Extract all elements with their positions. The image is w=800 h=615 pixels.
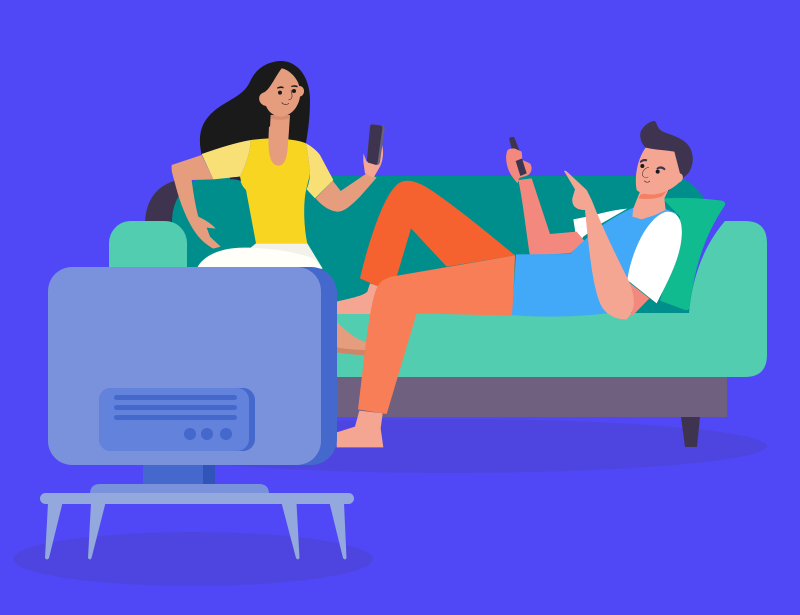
sofa seat and right arm	[325, 221, 767, 377]
tv front	[48, 267, 321, 465]
tv panel lines	[114, 395, 237, 420]
tv neck	[143, 460, 203, 486]
woman right arm	[316, 173, 377, 212]
woman neck and chest	[269, 127, 288, 166]
man neck	[632, 190, 668, 219]
woman face	[259, 68, 304, 117]
man front leg	[358, 255, 515, 414]
woman torso group	[172, 127, 333, 269]
remote	[509, 137, 527, 176]
remote lower part	[516, 159, 527, 176]
man face	[636, 148, 683, 194]
man head	[632, 121, 693, 219]
woman eyes and brows	[277, 85, 298, 95]
man bent leg	[360, 181, 515, 287]
man far hand with remote	[506, 137, 532, 183]
man near foot	[337, 411, 383, 447]
table floor shadow	[13, 532, 373, 586]
woman hand	[363, 143, 383, 178]
man shirt back	[573, 209, 627, 245]
man eyes and brows	[640, 164, 660, 174]
tv back shell	[120, 267, 337, 465]
sofa back	[172, 176, 705, 320]
woman hair	[200, 61, 310, 155]
man legs	[337, 181, 515, 447]
table legs	[45, 503, 346, 560]
woman shirt	[240, 138, 310, 243]
woman neck	[269, 115, 290, 140]
man neck shadow	[638, 189, 668, 199]
sofa far arm (dark)	[145, 178, 210, 225]
man far arm	[518, 178, 585, 255]
woman right sleeve	[306, 143, 333, 198]
woman foot	[337, 322, 377, 355]
sofa leg	[681, 417, 700, 447]
woman nose and mouth	[282, 90, 292, 104]
woman sofa sliver	[230, 177, 241, 181]
man near arm	[564, 171, 634, 319]
woman phone	[367, 124, 385, 165]
sofa floor shadow	[133, 419, 767, 473]
table	[40, 493, 354, 560]
man upper body	[512, 171, 725, 319]
tv	[48, 267, 337, 496]
woman	[172, 61, 385, 269]
woman neck shadow	[271, 115, 290, 120]
sofa	[109, 176, 767, 447]
man hair	[640, 121, 693, 191]
tv control panel	[99, 388, 255, 451]
sofa base	[320, 370, 727, 417]
woman right arm and phone	[316, 124, 385, 212]
woman left arm	[172, 155, 221, 249]
tv panel buttons	[184, 428, 232, 440]
woman left sleeve	[202, 140, 251, 179]
man torso and shorts	[512, 208, 677, 317]
sofa left arm	[109, 221, 187, 291]
man fist	[506, 148, 532, 183]
table top	[40, 493, 354, 504]
woman skirt	[197, 248, 323, 269]
woman skirt top	[248, 243, 323, 269]
man nose and mouth	[642, 167, 650, 182]
man far foot	[337, 283, 380, 314]
man white sleeve	[627, 212, 682, 303]
woman head group	[259, 68, 304, 140]
man near arm shadow	[625, 279, 649, 318]
man pillow	[660, 198, 725, 310]
tv base	[90, 484, 269, 496]
